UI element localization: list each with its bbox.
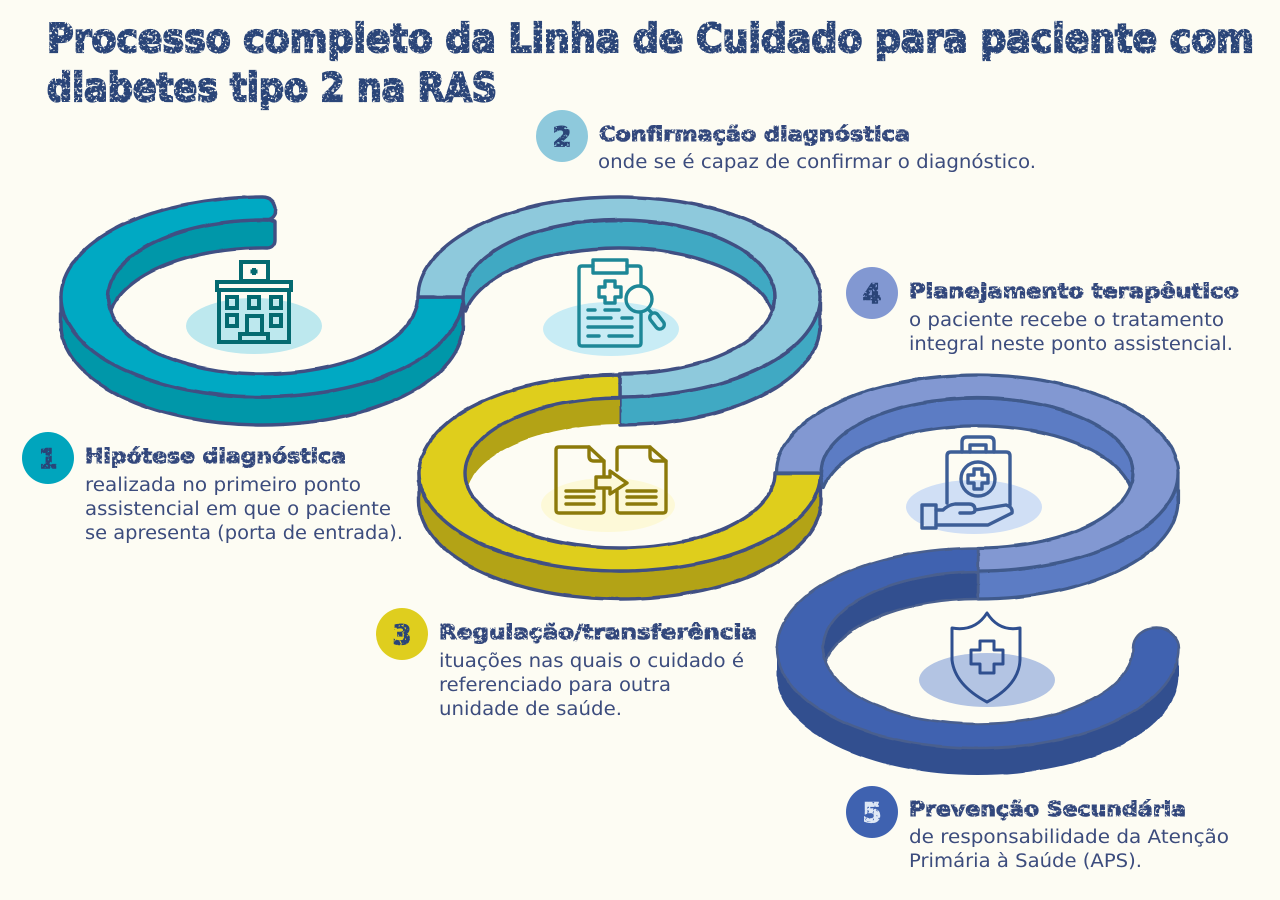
description 3 (439, 651, 744, 720)
description 3: referenciado para outra (439, 675, 671, 696)
badge 2 (536, 110, 588, 162)
badge 5: 5 (863, 798, 881, 829)
step 2: Confirmação diagnóstica (536, 110, 1036, 173)
step 1: Hipótese diagnóstica (22, 432, 403, 544)
step 5: Prevenção secundária (846, 786, 1229, 872)
badge 1 (22, 432, 74, 484)
icon: hospital (186, 262, 322, 354)
title: diabetes tipo 2 na RAS (47, 66, 497, 111)
description 2: onde se é capaz de confirmar o diagnóstico. (598, 152, 1036, 173)
ring 4: periwinkle segment (776, 375, 1178, 599)
description 5: Primária à Saúde (APS). (909, 851, 1142, 872)
description 5 (909, 827, 1229, 872)
badge 4: 4 (863, 279, 881, 310)
description 3: unidade de saúde. (439, 699, 622, 720)
step 3: Regulação/transferência (376, 608, 757, 720)
description 1: se apresenta (porta de entrada). (85, 523, 403, 544)
description 4: o paciente recebe o tratamento (909, 310, 1224, 331)
badge 2: 2 (553, 122, 571, 153)
icon: shield with cross (919, 613, 1055, 707)
description 1 (85, 475, 403, 544)
heading 4: Planejamento terapêutico (909, 279, 1239, 303)
description 3: ituações nas quais o cuidado é (439, 651, 744, 672)
badge 3: 3 (393, 620, 411, 651)
badge 4 (846, 267, 898, 319)
icon: document transfer (541, 447, 675, 532)
title (47, 17, 1254, 111)
description 1: realizada no primeiro ponto (85, 475, 361, 496)
description 1: assistencial em que o paciente (85, 499, 391, 520)
heading 1: Hipótese diagnóstica (85, 444, 346, 468)
icon: hand holding medical kit (906, 437, 1042, 534)
icon: clipboard with magnifier (543, 260, 679, 356)
heading 5: Prevenção Secundária (909, 797, 1186, 821)
badge 5 (846, 786, 898, 838)
ring 3: yellow segment (419, 375, 821, 599)
ring 2: light blue segment (418, 197, 820, 425)
description 4 (909, 310, 1233, 355)
description 4: integral neste ponto assistencial. (909, 334, 1233, 355)
step 4: Planejamento terapêutico (846, 267, 1239, 355)
ring 1: teal segment (61, 197, 463, 425)
heading 2: Confirmação diagnóstica (599, 122, 910, 146)
badge 3 (376, 608, 428, 660)
description 5: de responsabilidade da Atenção (909, 827, 1229, 848)
heading 3: Regulação/transferência (439, 620, 757, 644)
ring 5: dark blue segment (777, 548, 1179, 775)
badge 1: 1 (39, 444, 57, 475)
